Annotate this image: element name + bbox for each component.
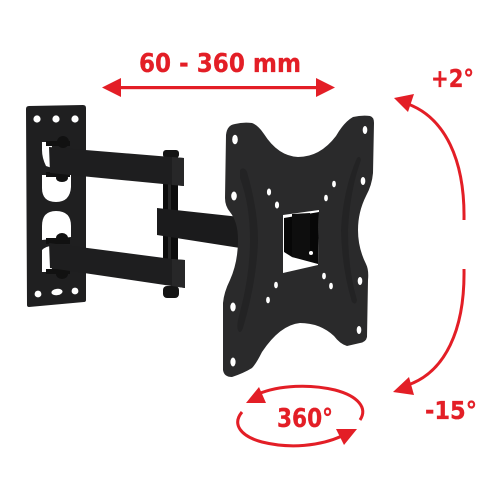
mounting holes xyxy=(230,126,367,366)
arrow: rotation ellipse upper xyxy=(246,386,363,420)
label: minus fifteen degrees: -15° xyxy=(425,396,477,425)
mount: wall bracket with swivel arms xyxy=(26,105,240,307)
arrow: horizontal double-headed extension xyxy=(102,78,335,97)
label: plus two degrees: +2° xyxy=(431,64,474,93)
vertical pivot pin xyxy=(163,150,179,298)
arrow: upward tilt xyxy=(394,94,464,220)
curved slot right xyxy=(341,157,361,304)
label: 360 degrees: 360° xyxy=(277,404,333,434)
centre cut-out with tilt hinge xyxy=(283,210,319,273)
curved slot left xyxy=(237,168,258,332)
wall plate xyxy=(26,105,86,307)
width label: 60 - 360 mm xyxy=(139,49,301,79)
middle arm xyxy=(157,208,240,248)
arrow: downward tilt xyxy=(393,269,464,395)
lower arm xyxy=(49,243,185,288)
TV mounting plate xyxy=(223,116,374,377)
upper arm xyxy=(49,147,184,186)
pivot bolts on wall plate xyxy=(46,136,70,279)
arrow: rotation ellipse lower xyxy=(238,412,357,446)
